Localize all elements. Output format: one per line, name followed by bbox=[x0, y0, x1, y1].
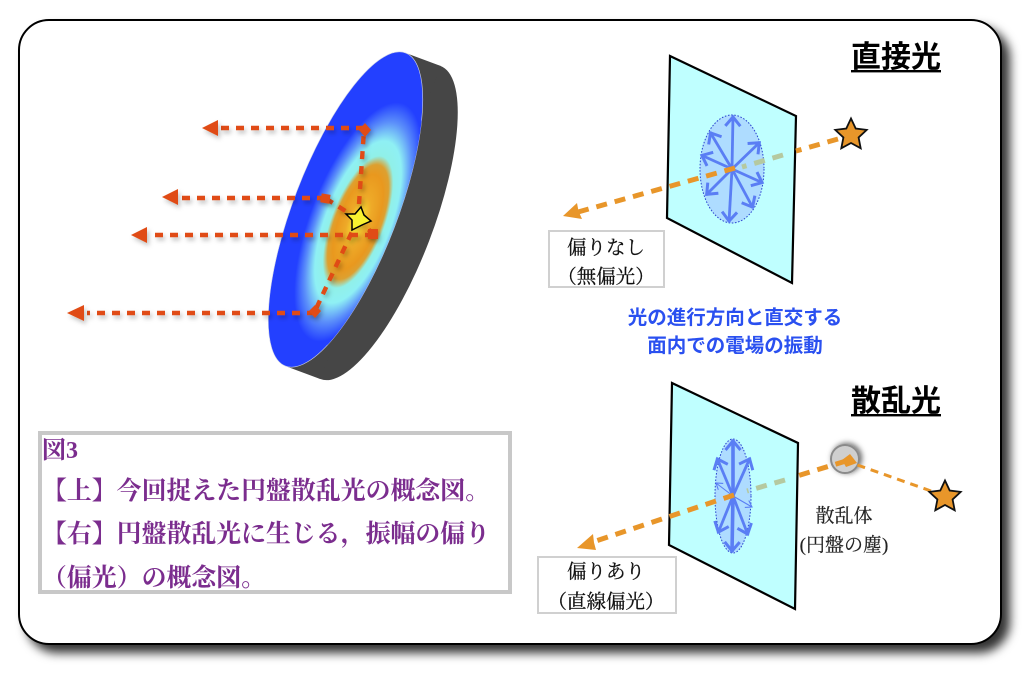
electric field arrows bbox=[701, 116, 763, 222]
caption text: 【右】円盤散乱光に生じる，振幅の偏り bbox=[42, 520, 490, 549]
scattering point bbox=[842, 454, 857, 467]
heading: direct light: 直接光 bbox=[851, 41, 941, 74]
heading: scattered light: 散乱光 bbox=[851, 385, 941, 418]
scatterer label: (円盤の塵) bbox=[800, 534, 888, 556]
disk illustration bbox=[67, 52, 458, 380]
scattered light paths bbox=[87, 128, 373, 313]
icon: central star bbox=[346, 207, 371, 230]
polarization plane bbox=[669, 383, 798, 609]
polarization plane bbox=[667, 56, 796, 283]
explanatory note bbox=[628, 306, 842, 357]
arrowhead bbox=[577, 534, 596, 550]
explanatory note: 光の進行方向と直交する bbox=[628, 306, 842, 329]
label: polarized bbox=[538, 557, 676, 613]
diagram: scattered light bbox=[538, 383, 961, 613]
vibration ellipse bbox=[700, 115, 764, 223]
vibration ellipse bbox=[715, 439, 751, 553]
caption box bbox=[40, 433, 510, 592]
scatterer label bbox=[800, 505, 888, 556]
label: polarized: 偏りあり bbox=[567, 561, 645, 583]
explanatory note: 面内での電場の振動 bbox=[647, 335, 823, 357]
label: unpolarized: （無偏光） bbox=[557, 266, 655, 288]
icon: star bbox=[835, 118, 867, 148]
scatterer dust grain bbox=[831, 445, 859, 473]
label: unpolarized: 偏りなし bbox=[567, 237, 645, 259]
caption text: 【上】今回捉えた円盤散乱光の概念図。 bbox=[42, 477, 490, 505]
light ray from scatterer bbox=[593, 461, 846, 542]
light ray bbox=[578, 139, 838, 212]
caption text: （偏光）の概念図。 bbox=[42, 564, 266, 592]
scatterer label: 散乱体 bbox=[815, 505, 873, 527]
arrowheads and scattering points bbox=[67, 120, 378, 321]
label: unpolarized bbox=[549, 231, 664, 288]
electric field arrows bbox=[716, 440, 752, 552]
disk side wall bbox=[272, 47, 489, 398]
label: polarized: （直線偏光） bbox=[547, 590, 665, 613]
caption text bbox=[42, 437, 490, 592]
light ray to scatterer bbox=[849, 462, 931, 491]
icon: star bbox=[929, 480, 961, 510]
diagram: direct light bbox=[549, 56, 867, 288]
arrowhead bbox=[563, 203, 582, 219]
caption text: 図3 bbox=[42, 437, 78, 464]
disk face with scattered light glow bbox=[268, 52, 424, 368]
